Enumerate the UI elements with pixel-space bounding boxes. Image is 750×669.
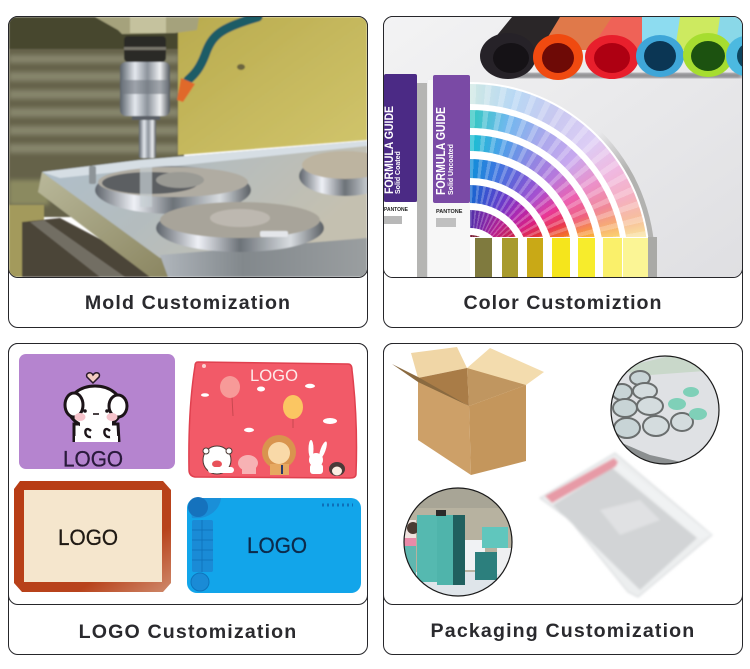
blue roll [636,35,684,77]
pig [238,455,258,474]
caption: logo: LOGO Customization [79,621,297,643]
orange nozzle [177,78,195,102]
milling tool [139,120,156,158]
caption: mold: Mold Customization [85,292,291,314]
lion [262,435,296,475]
orange roll [533,34,583,80]
dog mascot [65,386,127,442]
red mat: LOGO [250,366,298,385]
mould cavity: rear [95,166,251,214]
red roll [585,35,639,79]
guide book: solid uncoated [428,75,470,277]
cardboard box [392,347,544,475]
guide book: solid uncoated: PANTONE [436,209,463,215]
mould cavity: right [299,151,391,196]
heart [87,373,99,383]
guide book: solid coated: Solid Coated [395,151,402,194]
clouds [201,384,337,432]
panel: logo customization [8,343,368,655]
photo: packaging options [383,343,743,605]
purple mat: LOGO [63,446,123,472]
clear self-seal bag [540,453,712,597]
panel: mold customization [8,16,368,328]
formula guides and swatch strips [384,74,648,277]
panel: packaging customization [383,343,743,655]
guide book: solid uncoated: FORMULA GUIDE [433,107,448,195]
blue paint mat: LOGO [247,533,307,558]
guide book: solid coated: PANTONE [384,207,409,213]
background and rolled mats [384,17,742,277]
caption: packaging: Packaging Customization [431,620,695,642]
yellow swatch strips [475,238,648,277]
rabbit [308,440,328,474]
purple mat [19,354,175,472]
circle photo: stacked boxes [404,488,512,598]
photo: colour guide and silicone rolls [383,16,743,278]
circle photo: wrapped discs [611,356,719,464]
black roll [480,33,536,79]
photo: four logo mats [8,343,368,605]
baking mat: LOGO [58,525,118,550]
red mat [189,362,356,478]
mould cavity: front [156,202,324,252]
baking mat [14,481,171,592]
balloons [220,376,303,428]
panel: color customization [383,16,743,328]
blue paint mat [187,497,361,593]
colour fan [470,82,654,237]
caption: color: Color Customiztion [463,292,663,314]
spindle collar [124,36,166,62]
penguin [329,462,345,476]
bear [203,446,234,474]
coolant hose [188,17,258,80]
guide book: solid coated [382,74,427,277]
green roll [683,33,733,77]
spindle housing [95,17,199,34]
blue roll, cropped [726,36,750,76]
photo: CNC milling machine [8,16,368,278]
chuck [120,62,170,120]
guide book: solid uncoated: Solid Uncoated [448,144,455,195]
